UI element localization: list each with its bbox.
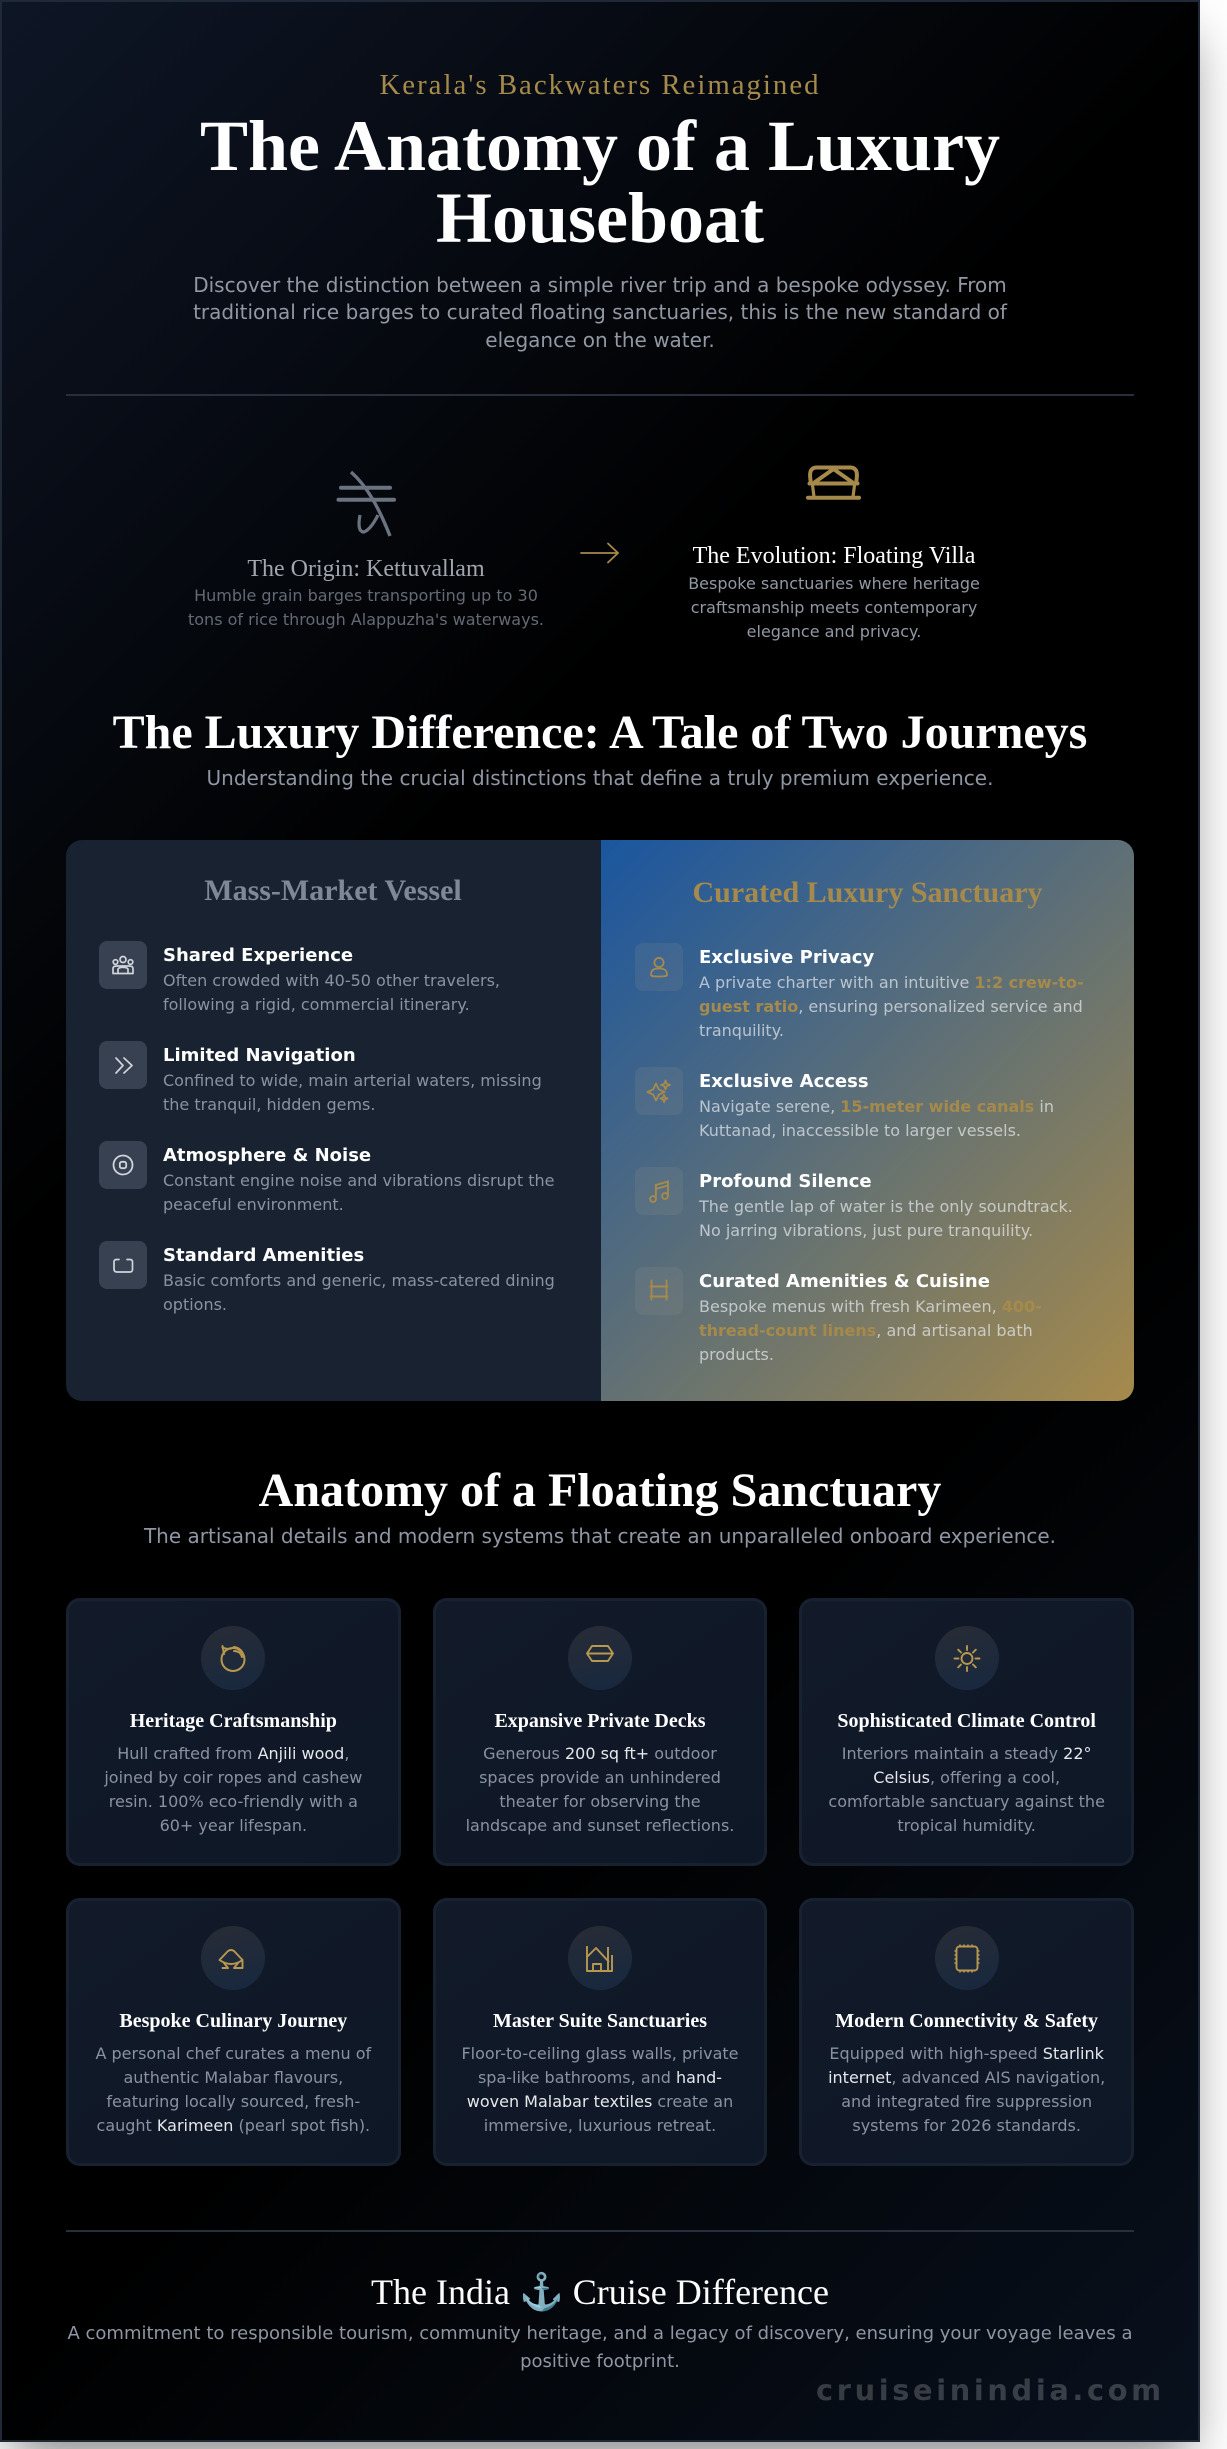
intro paragraph: elegance on the water. xyxy=(485,328,715,352)
card text: tropical humidity. xyxy=(897,1816,1036,1834)
eyebrow: Kerala's Backwaters Reimagined xyxy=(380,68,820,100)
title: Houseboat xyxy=(436,178,764,258)
item: curated amenities xyxy=(635,1267,1042,1364)
intro paragraph: Discover the distinction between a simple river trip and a bespoke odyssey. From xyxy=(193,272,1007,296)
card text xyxy=(104,1744,362,1834)
card text: comfortable sanctuary against the xyxy=(828,1792,1105,1810)
item text xyxy=(699,1096,1054,1140)
footer heading: The India ⚓ Cruise Difference xyxy=(371,2272,829,2312)
card text: authentic Malabar flavours, xyxy=(123,2068,343,2086)
title xyxy=(200,106,1000,258)
icon: double chevron xyxy=(99,1041,147,1089)
icon: chef dome xyxy=(201,1926,265,1990)
item: exclusive privacy xyxy=(635,943,1084,1040)
item text xyxy=(699,1296,1042,1364)
card title: Bespoke Culinary Journey xyxy=(119,2010,347,2032)
item: atmosphere and noise xyxy=(99,1141,554,1214)
item text: Constant engine noise and vibrations disrupt the xyxy=(163,1170,554,1190)
watermark: cruiseinindia.com xyxy=(816,2373,1165,2407)
description: The Origin: tons of rice through Alappuzha's waterways. xyxy=(188,610,544,629)
icon: plain tray xyxy=(99,1241,147,1289)
item title: Exclusive Privacy xyxy=(699,947,874,968)
item text: following a rigid, commercial itinerary. xyxy=(163,995,470,1014)
item text: products. xyxy=(699,1345,774,1364)
item text xyxy=(163,1270,555,1314)
card title: Expansive Private Decks xyxy=(494,1710,706,1732)
card: Expansive Private Decks xyxy=(433,1598,767,1866)
section subheading: Floating Sanctuary: The artisanal details and modern systems that create an unparalleled onboard experience. xyxy=(144,1524,1056,1548)
item text xyxy=(163,1070,542,1114)
card: Sophisticated Climate Control xyxy=(799,1598,1134,1866)
card: Modern Connectivity & Safety xyxy=(799,1898,1134,2166)
item text: options. xyxy=(163,1295,227,1314)
item text: thread-count linens, and artisanal bath xyxy=(699,1321,1033,1340)
item title: Limited Navigation xyxy=(163,1045,356,1066)
arrow: origin to evolution xyxy=(580,542,619,564)
card: Master Suite Sanctuaries xyxy=(433,1898,767,2166)
item text: No jarring vibrations, just pure tranquility. xyxy=(699,1221,1033,1240)
card text: resin. 100% eco-friendly with a xyxy=(109,1792,358,1810)
heading: Mass-Market Vessel: Mass-Market Vessel xyxy=(204,874,462,907)
card text: systems for 2026 standards. xyxy=(852,2116,1081,2134)
item: limited navigation xyxy=(99,1041,542,1114)
icon: heritage xyxy=(201,1626,265,1690)
footer text xyxy=(67,2322,1133,2372)
card text: theater for observing the xyxy=(499,1792,701,1810)
footer text: A commitment to responsible tourism, community heritage, and a legacy of discovery, ensuring your voyage leaves a xyxy=(67,2322,1133,2344)
icon: engine target xyxy=(99,1141,147,1189)
item text xyxy=(163,970,500,1014)
card text: Celsius, offering a cool, xyxy=(873,1768,1060,1786)
item: profound silence xyxy=(635,1167,1073,1240)
panel: curated luxury sanctuary xyxy=(601,840,1134,1401)
card text: spa-like bathrooms, and hand- xyxy=(478,2068,722,2086)
item text xyxy=(699,972,1084,1040)
item text: Often crowded with 40-50 other travelers, xyxy=(163,970,500,990)
card text: featuring locally sourced, fresh- xyxy=(106,2092,360,2110)
section subheading: The Luxury Difference: Understanding the crucial distinctions that define a truly premium experience. xyxy=(207,766,993,790)
card text xyxy=(461,2044,739,2134)
icon: floating villa xyxy=(806,466,861,500)
item text: Kuttanad, inaccessible to larger vessels. xyxy=(699,1121,1021,1140)
description: The Evolution: craftsmanship meets contemporary xyxy=(691,598,977,617)
card text: Floor-to-ceiling glass walls, private xyxy=(461,2044,739,2062)
panel: mass-market vessel xyxy=(66,840,601,1401)
item title: Exclusive Access xyxy=(699,1071,869,1092)
card text: immersive, luxurious retreat. xyxy=(484,2116,716,2134)
item text: the tranquil, hidden gems. xyxy=(163,1095,375,1114)
card text: woven Malabar textiles create an xyxy=(467,2092,733,2110)
icon: table xyxy=(635,1267,683,1315)
icon: house xyxy=(568,1926,632,1990)
card title: Master Suite Sanctuaries xyxy=(493,2010,707,2032)
panel: comparison xyxy=(66,840,1134,1401)
card text: Generous 200 sq ft+ outdoor xyxy=(483,1744,717,1762)
section heading: The Luxury Difference: The Luxury Difference: A Tale of Two Journeys xyxy=(113,706,1087,758)
item text: Confined to wide, main arterial waters, missing xyxy=(163,1070,542,1090)
item title: Profound Silence xyxy=(699,1171,872,1192)
icon: chip xyxy=(935,1926,999,1990)
icon: group of people xyxy=(99,941,147,989)
card text: Interiors maintain a steady 22° xyxy=(842,1744,1092,1762)
card text: A personal chef curates a menu of xyxy=(95,2044,371,2062)
icon: person xyxy=(635,943,683,991)
item: shared experience xyxy=(99,941,500,1014)
item title: Standard Amenities xyxy=(163,1245,364,1266)
description: The Evolution xyxy=(688,574,980,641)
intro paragraph: traditional rice barges to curated floating sanctuaries, this is the new standard of xyxy=(193,300,1007,324)
section heading: Anatomy of a Floating Sanctuary: Anatomy of a Floating Sanctuary xyxy=(259,1464,941,1517)
item text: tranquility. xyxy=(699,1021,784,1040)
origin block: Kettuvallam xyxy=(188,470,544,629)
card text: spaces provide an unhindered xyxy=(479,1768,721,1786)
icon: rice barge glyph xyxy=(336,470,396,536)
card text: caught Karimeen (pearl spot fish). xyxy=(97,2116,370,2134)
description: The Origin: Humble grain barges transporting up to 30 xyxy=(194,586,538,605)
heading: The Evolution: The Evolution: Floating Villa xyxy=(693,542,975,568)
icon: deck xyxy=(568,1626,632,1690)
card text: internet, advanced AIS navigation, xyxy=(828,2068,1105,2086)
item: standard amenities xyxy=(99,1241,555,1314)
card title: Sophisticated Climate Control xyxy=(837,1710,1096,1732)
card text: 60+ year lifespan. xyxy=(160,1816,307,1834)
item text: The gentle lap of water is the only soundtrack. xyxy=(699,1196,1073,1216)
card text xyxy=(466,1744,734,1834)
card title: Heritage Craftsmanship xyxy=(130,1710,337,1732)
item text: Bespoke menus with fresh Karimeen, 400- xyxy=(699,1296,1042,1316)
card text: joined by coir ropes and cashew xyxy=(104,1768,362,1786)
card title: Modern Connectivity & Safety xyxy=(835,2010,1098,2032)
icon: sun xyxy=(935,1626,999,1690)
description: The Evolution: elegance and privacy. xyxy=(747,622,921,641)
item text xyxy=(163,1170,554,1214)
card text: Hull crafted from Anjili wood, xyxy=(117,1744,349,1762)
item text: Basic comforts and generic, mass-catered dining xyxy=(163,1270,555,1290)
icon: sparkles xyxy=(635,1067,683,1115)
item text: peaceful environment. xyxy=(163,1195,344,1214)
description: The Evolution: Bespoke sanctuaries where heritage xyxy=(688,574,980,593)
card text: and integrated fire suppression xyxy=(841,2092,1092,2110)
item text: A private charter with an intuitive 1:2 crew-to- xyxy=(699,972,1084,992)
item title: Curated Amenities & Cuisine xyxy=(699,1271,990,1292)
card: Heritage Craftsmanship xyxy=(66,1598,401,1866)
description: The Origin xyxy=(188,586,544,629)
card text: landscape and sunset reflections. xyxy=(466,1816,734,1834)
card: Bespoke Culinary Journey xyxy=(66,1898,401,2166)
intro paragraph xyxy=(193,272,1008,352)
card text xyxy=(828,1744,1105,1834)
card text xyxy=(95,2044,372,2134)
item: exclusive access xyxy=(635,1067,1054,1140)
heading: Curated Luxury Sanctuary: Curated Luxury Sanctuary xyxy=(692,876,1043,909)
item text: guest ratio, ensuring personalized service and xyxy=(699,997,1083,1016)
footer text: positive footprint. xyxy=(520,2351,680,2372)
card text: Equipped with high-speed Starlink xyxy=(829,2044,1104,2062)
item text xyxy=(698,1196,1073,1240)
card text xyxy=(828,2044,1105,2134)
heading: The Origin: The Origin: Kettuvallam xyxy=(247,556,485,582)
item title: Shared Experience xyxy=(163,945,353,966)
title: The Anatomy of a Luxury xyxy=(200,106,1000,186)
item text: Navigate serene, 15-meter wide canals in xyxy=(699,1096,1054,1116)
item title: Atmosphere & Noise xyxy=(163,1145,371,1166)
icon: music note xyxy=(635,1167,683,1215)
evolution block: Floating Villa xyxy=(688,466,980,641)
